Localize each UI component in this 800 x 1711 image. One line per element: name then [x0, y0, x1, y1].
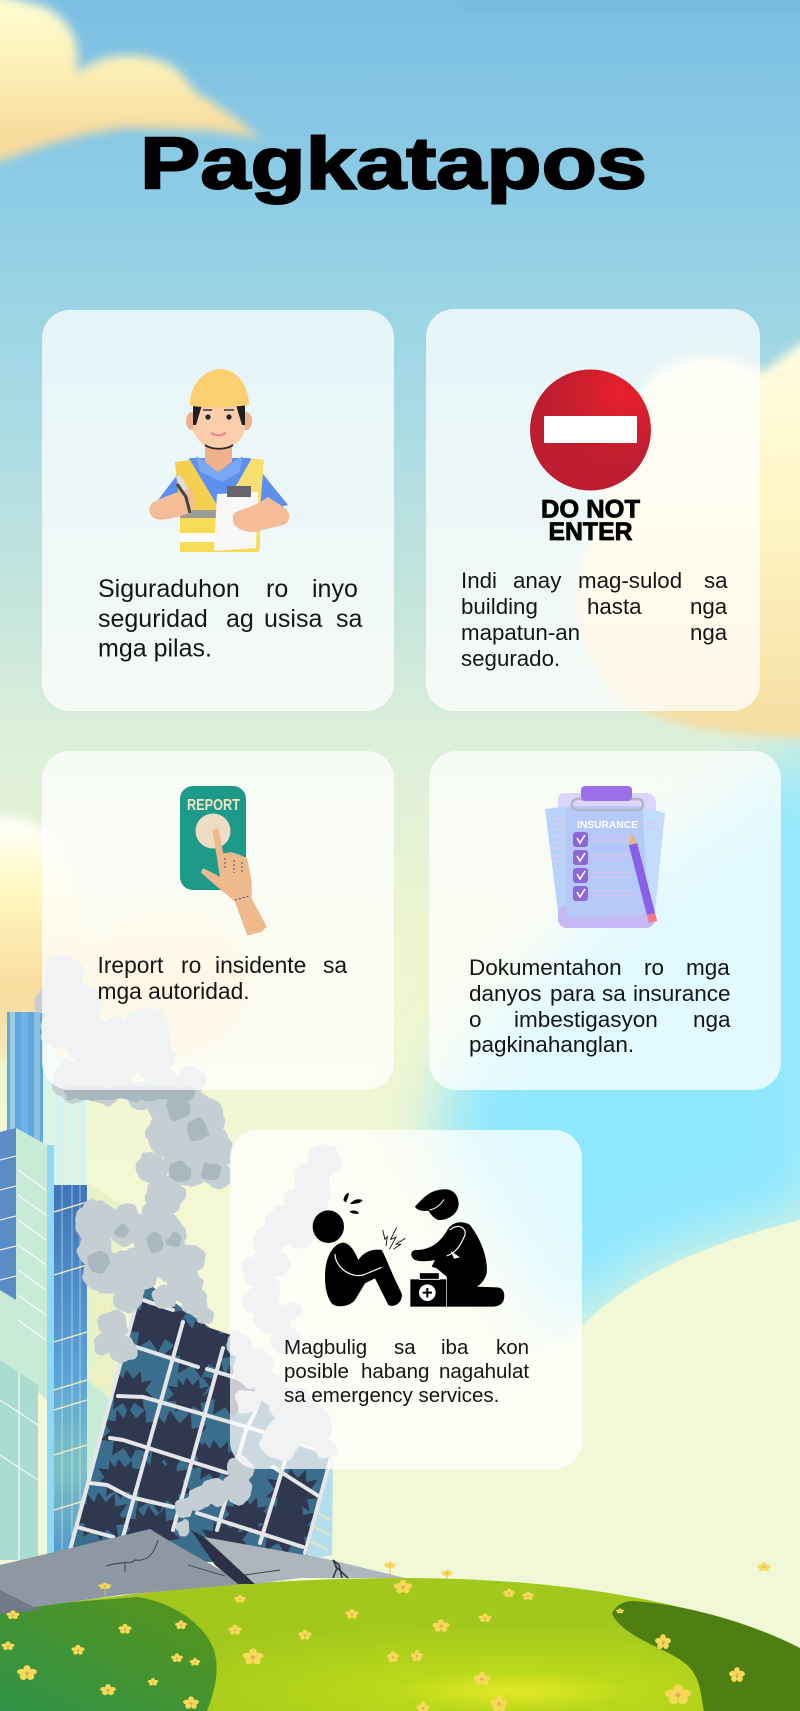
text: document: imbestigasyon [514, 1007, 658, 1032]
text: document: pagkinahanglan. [469, 1032, 634, 1057]
flowers [1, 1562, 771, 1711]
text: help others: iba [441, 1336, 469, 1359]
text: do not enter: segurado. [461, 646, 560, 671]
text: help others: habang [361, 1360, 429, 1383]
text: help others: sa [394, 1336, 416, 1359]
icon: no entry sign: DO NOT [541, 496, 640, 524]
text: help others: nagahulat [439, 1360, 529, 1383]
text: help others: kon [496, 1336, 529, 1359]
text: do not enter: nga [690, 594, 728, 619]
text: document: danyos [469, 981, 542, 1006]
text: safety check: inyo [312, 575, 358, 603]
icon: insurance clipboard [545, 786, 665, 928]
panel: help others [230, 1130, 582, 1469]
text: report: sa [323, 952, 347, 978]
title: Pagkatapos [140, 124, 647, 204]
text: do not enter: Indi [461, 568, 497, 593]
text: do not enter: building [461, 594, 538, 619]
text: safety check: Siguraduhon [98, 575, 240, 603]
text: document: para [550, 981, 596, 1006]
icon: no entry sign: ENTER [548, 518, 632, 546]
cracked ground slabs [0, 1529, 405, 1614]
panel: safety check [42, 310, 394, 711]
text: safety check: sa [336, 605, 362, 633]
text: safety check: seguridad [98, 605, 208, 633]
text: safety check: ro [266, 575, 288, 603]
background: pale hill [0, 1220, 800, 1711]
cloud: right [577, 330, 800, 738]
text: do not enter: sa [704, 568, 728, 593]
icon: no entry sign [530, 370, 651, 546]
text: safety check: ag [226, 605, 254, 633]
text: help others: posible [284, 1360, 349, 1383]
text: document: insurance [633, 981, 731, 1006]
icon: construction worker [149, 369, 289, 552]
text: report: insidente [215, 952, 306, 978]
text: document: o [469, 1007, 482, 1032]
icon: report button and hand [180, 786, 267, 936]
text: document: nga [693, 1007, 731, 1032]
text: safety check: usisa [264, 605, 322, 633]
illustration: collapsing building [68, 1280, 333, 1562]
text: document: mga [686, 955, 730, 980]
text: safety check: mga pilas. [98, 634, 212, 662]
icon: insurance clipboard: INSURANCE [577, 819, 638, 831]
cloud: top left [0, 0, 262, 172]
text: do not enter: mapatun-an [461, 620, 580, 645]
text: do not enter: hasta [587, 594, 642, 619]
panel: report [42, 751, 394, 1090]
text: do not enter: nga [690, 620, 728, 645]
text: report: Ireport [98, 952, 164, 978]
icon: first aid helpers [313, 1189, 504, 1307]
text: do not enter: mag-sulod [578, 568, 682, 593]
smoke plumes [36, 955, 341, 1535]
cloud: left [0, 817, 248, 1060]
panel: do not enter [426, 309, 760, 711]
text: document: ro [644, 955, 664, 980]
text: do not enter: anay [513, 568, 562, 593]
text: help others: sa emergency services. [284, 1384, 499, 1407]
text: document: sa [602, 981, 626, 1006]
text: report: mga autoridad. [98, 978, 250, 1004]
grass hill [0, 1578, 800, 1711]
towers: skyscrapers on left [0, 1012, 333, 1560]
text: help others: Magbulig [284, 1336, 367, 1359]
icon: report button and hand: REPORT [187, 797, 240, 814]
text: report: ro [181, 952, 201, 978]
text: document: Dokumentahon [469, 955, 622, 980]
panel: document [429, 751, 781, 1090]
